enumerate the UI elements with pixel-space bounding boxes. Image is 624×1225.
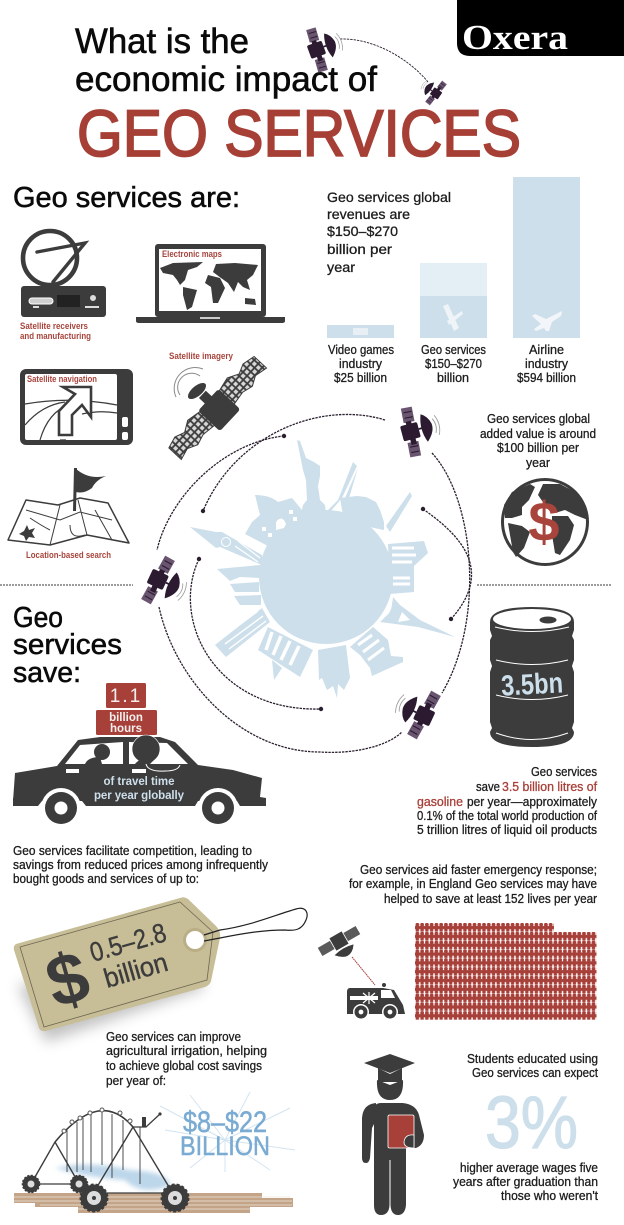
bar: video games [327, 325, 394, 338]
landmark: left group [217, 565, 261, 605]
heading: Geo services save: save: [13, 657, 81, 689]
icon: satellite top [396, 400, 446, 459]
label: location-based search: Location-based search [26, 550, 111, 560]
landmark: big ben [190, 527, 262, 565]
text: emergency response: for example, in England Geo services may have [349, 876, 597, 891]
landmark: domed building [340, 496, 384, 530]
text: gasoline: 3.5 billion litres of [502, 779, 597, 794]
icon: price tag: 0.5–2.8 [86, 917, 170, 968]
bar: airline [513, 177, 580, 338]
icon: car [10, 735, 268, 828]
text: higher wages [453, 1160, 598, 1203]
bar labels: $25 billion [334, 370, 387, 385]
heading: Geo services save: Geo [13, 602, 63, 634]
text: competition: bought goods and services of up to: [13, 871, 199, 886]
bar labels: Airline [529, 342, 564, 357]
water spray [55, 1164, 170, 1190]
icon: laptop with world map: Electronic maps [162, 249, 222, 259]
box: billion hours: hours [110, 723, 142, 735]
landmark: skyscraper [388, 541, 428, 594]
bar labels: $594 billion [517, 370, 576, 385]
text: gasoline [417, 764, 597, 837]
text: irrigation: agricultural irrigation, helping [106, 1043, 267, 1058]
icon: price tag: billion [100, 947, 171, 994]
heading: Geo services are: Geo services are: [13, 182, 240, 214]
text: revenues: revenues are [327, 206, 410, 222]
orbit paths [157, 414, 472, 752]
icon: car: per year globally [94, 790, 185, 802]
text: revenues [327, 189, 451, 275]
text: students [467, 1051, 598, 1080]
text: added value: year [526, 455, 551, 470]
landmark: columned temple [258, 627, 313, 680]
chart: 152 lives people grid [415, 923, 596, 1020]
icon: satellite bottom [387, 680, 443, 742]
text: revenues: year [327, 259, 355, 275]
text: added value: added value is around [480, 426, 596, 441]
label: satellite receivers [20, 321, 91, 341]
text: emergency response: Geo services aid faster emergency response; [360, 862, 597, 877]
title [75, 22, 521, 170]
icon: large satellite [160, 348, 273, 466]
text: gasoline: per year—approximately [467, 794, 597, 809]
bar labels: industry [525, 356, 568, 371]
title: GEO SERVICES [77, 96, 521, 170]
text: students: Students educated using [467, 1051, 598, 1066]
text: irrigation: to achieve global cost savings [106, 1058, 262, 1073]
icon: laptop with world map [136, 244, 285, 323]
illustration: world with landmarks [190, 440, 455, 698]
text: higher wages: those who weren't [501, 1188, 598, 1203]
bar labels: $150–$270 [425, 356, 482, 371]
icon: satellite left [139, 553, 195, 615]
landmark: eiffel tower [380, 597, 455, 637]
text: gasoline: Geo services [531, 764, 597, 779]
text: irrigation [106, 1029, 267, 1088]
bar labels: billion [437, 370, 469, 385]
text: revenues: $150–$270 [327, 223, 398, 239]
text: competition [13, 843, 268, 886]
icon: price tag: $ [38, 936, 98, 1024]
text: irrigation: Geo services can improve [106, 1029, 241, 1044]
bar labels [328, 342, 576, 385]
callout: $8-$22 billion [160, 1092, 295, 1172]
car with travel time stats [10, 683, 268, 828]
icon: header satellites with dashed path [302, 20, 448, 107]
title: economic impact of [75, 60, 377, 99]
text: gasoline: gasoline [417, 794, 463, 809]
text: gasoline: save [476, 779, 500, 794]
icon: satellite navigation device [20, 369, 133, 445]
icon: irrigation machine [14, 1108, 293, 1213]
text: competition: savings from reduced prices among infrequently [13, 857, 268, 872]
text: higher wages: higher average wages five [460, 1160, 598, 1175]
bar: geo services [420, 263, 487, 338]
icon: satellite navigation device: Satellite navigation [27, 374, 97, 384]
callout: $8-$22 billion: $8–$22 [183, 1106, 267, 1139]
text: revenues: billion per [327, 241, 392, 257]
text: competition: Geo services facilitate competition, leading to [13, 843, 252, 858]
icon: student [362, 1054, 424, 1215]
title: What is the [75, 22, 249, 61]
icon: globe with dollar [502, 480, 588, 564]
icon: satellite over ambulance [317, 924, 405, 1020]
bar labels: Video games [328, 342, 394, 357]
landmark: dome and palace [245, 495, 304, 546]
icon: map with flag [8, 468, 129, 545]
label: satellite imagery: Satellite imagery [169, 351, 233, 361]
icon: satellite receiver [21, 231, 106, 317]
text: added value [480, 411, 596, 470]
bar labels: industry [339, 356, 382, 371]
landmark: spires [326, 462, 358, 512]
icon: car: of travel time [104, 776, 174, 788]
box: 1.1 [106, 683, 146, 708]
divider lines [0, 584, 612, 586]
ground stripes [14, 1193, 293, 1213]
text: students: Geo services can expect [472, 1065, 598, 1080]
heading: Geo services save: services [13, 629, 122, 661]
heading: Geo services save [13, 602, 122, 689]
icon: price tag [14, 897, 307, 1042]
text: gasoline: 0.1% of the total world production of [417, 808, 597, 823]
logo: Oxera: Oxera [462, 18, 568, 57]
label: satellite receivers: Satellite receivers [20, 321, 88, 331]
landmark: right spire [386, 492, 412, 532]
text: emergency response [349, 862, 598, 906]
text: added value: $100 billion per [497, 440, 580, 455]
text: gasoline: 5 trillion litres of liquid oil products [417, 822, 597, 837]
text: revenues: Geo services global [327, 189, 451, 205]
icon: oil barrel [490, 607, 574, 747]
bar labels: Geo services [421, 342, 486, 357]
landmark: statue of liberty [297, 440, 326, 514]
landmark: lower left tower [215, 608, 270, 657]
label: satellite receivers: and manufacturing [20, 331, 91, 341]
text: added value: Geo services global [487, 411, 590, 426]
icon: globe with dollar: $ [528, 490, 560, 553]
box: 1.1: 1.1 [110, 686, 142, 707]
bar chart: industry revenues [327, 177, 580, 385]
icon: oil barrel: 3.5bn [500, 667, 564, 703]
box: billion hours [96, 710, 157, 735]
logo: Oxera [457, 0, 624, 57]
landmark: lower right building [350, 627, 403, 676]
text: emergency response: helped to save at least 152 lives per year [384, 891, 598, 906]
callout: $8-$22 billion: BILLION [180, 1131, 270, 1161]
text: irrigation: per year of: [106, 1073, 166, 1088]
figure: 3%: 3% [485, 1081, 578, 1164]
landmark: cathedral [318, 645, 350, 698]
box: billion hours: billion [109, 712, 143, 724]
text: higher wages: years after graduation than [453, 1174, 598, 1189]
